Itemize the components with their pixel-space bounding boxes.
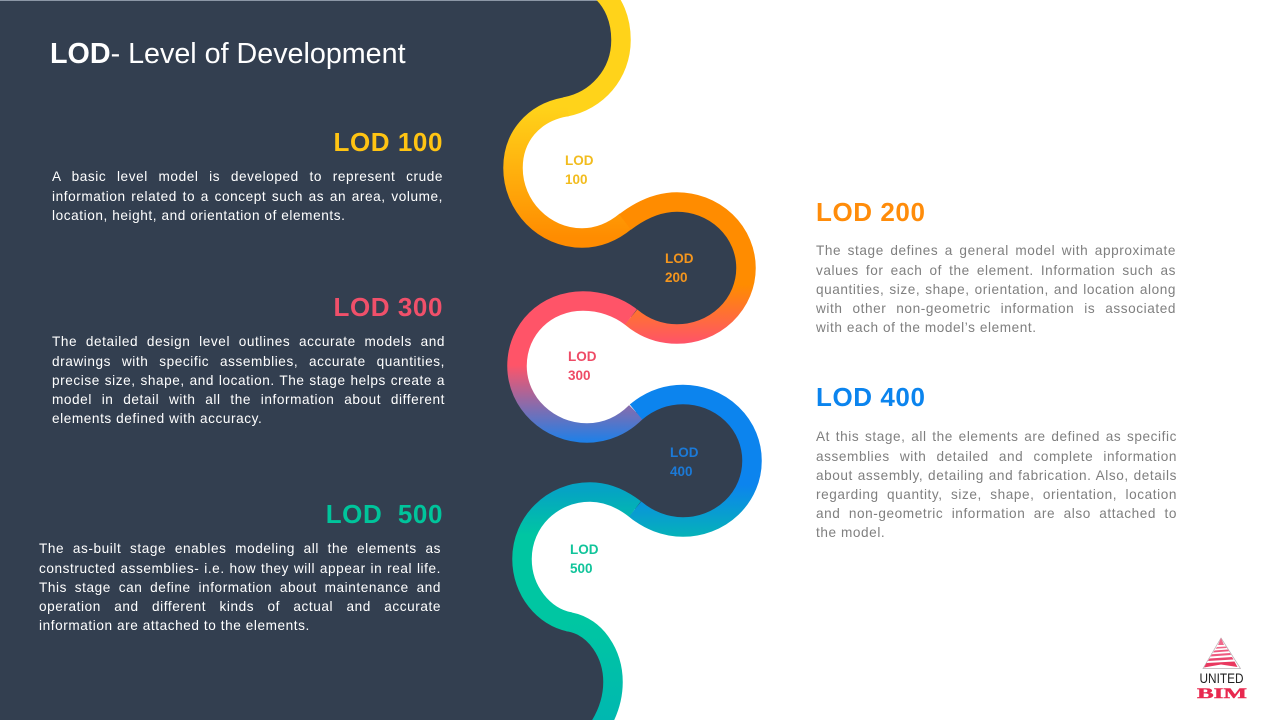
ribbon label: LOD 500: LOD: [570, 542, 598, 557]
text: LOD 400 description: assemblies with detailed and complete information: [816, 449, 1177, 464]
text: LOD 500 description: The as-built stage enables modeling all the elements as: [39, 541, 441, 556]
ribbon label: LOD 100: 100: [565, 172, 588, 187]
ribbon segment: teal bottom: [568, 622, 613, 720]
ribbon label: LOD 200: [665, 251, 694, 285]
ribbon label: LOD 500: 500: [570, 561, 593, 576]
text: LOD 400 description: and non-geometric information are also attached to: [816, 506, 1177, 521]
ribbon segment: LOD 400: [635, 394, 752, 527]
ribbon label: LOD 100: [565, 153, 594, 187]
text: LOD 200 description: [816, 243, 1176, 335]
text: LOD 300 description: model in detail with all the information about different: [52, 392, 445, 407]
ribbon label: LOD 200: 200: [665, 270, 688, 285]
text: LOD 200 description: with each of the model’s element.: [816, 320, 1037, 335]
heading: LOD 500: LOD 500: [326, 499, 443, 529]
text: LOD 100 description: location, height, and orientation of elements.: [52, 208, 345, 223]
ribbon label: LOD 400: LOD: [670, 445, 698, 460]
ribbon label: LOD 300: 300: [568, 368, 591, 383]
text: LOD 500 description: operation and different kinds of actual and accurate: [39, 599, 441, 614]
text: LOD 300 description: precise size, shape, and location. The stage helps create a: [52, 373, 445, 388]
text: LOD 200 description: The stage defines a general model with approximate: [816, 243, 1176, 258]
ribbon label: LOD 400: [670, 445, 698, 479]
title: LOD- Level of Development: [50, 38, 406, 70]
text: LOD 500 description: [39, 541, 441, 633]
text: LOD 100 description: A basic level model is developed to represent crude: [52, 169, 443, 184]
ribbon label: LOD 300: LOD: [568, 349, 596, 364]
ribbon segment: LOD 100: [513, 107, 626, 238]
text: LOD 500 description: This stage can define information about maintenance and: [39, 580, 441, 595]
text: LOD 400 description: [816, 429, 1177, 540]
text: LOD 200 description: quantities, size, shape, orientation, and location along: [816, 282, 1176, 297]
text: LOD 400 description: At this stage, all the elements are defined as specific: [816, 429, 1177, 444]
ribbon segment: yellow top: [565, 0, 621, 107]
text: LOD 100 description: [52, 169, 443, 223]
text: LOD 100 description: information related to a concept such as an area, volume,: [52, 189, 443, 204]
logo wordmark BIM: BIM: [1197, 686, 1247, 702]
text: LOD 400 description: the model.: [816, 525, 885, 540]
ribbon segment: LOD 200: [625, 202, 746, 334]
text: LOD 200 description: with other non-geometric information is associated: [816, 301, 1176, 316]
heading: LOD 300: LOD 300: [334, 292, 443, 322]
text: LOD 300 description: [52, 334, 445, 426]
ribbon segment: LOD 500: [522, 492, 635, 622]
logo: United BIM: [1197, 638, 1247, 702]
heading: LOD 100: LOD 100: [334, 127, 443, 157]
dark background panel: [0, 0, 752, 720]
heading: LOD 400: LOD 400: [816, 382, 925, 412]
heading: LOD 200: LOD 200: [816, 197, 925, 227]
text: LOD 300 description: drawings with specific assemblies, accurate quantities,: [52, 354, 445, 369]
ribbon label: LOD 300: [568, 349, 596, 383]
logo wordmark UNITED: UNITED: [1200, 671, 1244, 686]
text: LOD 300 description: elements defined with accuracy.: [52, 411, 262, 426]
logo triangle: [1203, 638, 1240, 668]
text: LOD 500 description: constructed assemblies- i.e. how they will appear in real life.: [39, 561, 441, 576]
ribbon segment: LOD 300: [517, 301, 636, 433]
ribbon label: LOD 500: [570, 542, 598, 576]
text: LOD 500 description: information are attached to the elements.: [39, 618, 310, 633]
ribbon label: LOD 100: LOD: [565, 153, 594, 168]
text: LOD 400 description: regarding quantity, size, shape, orientation, location: [816, 487, 1177, 502]
ribbon label: LOD 200: LOD: [665, 251, 694, 266]
text: LOD 400 description: about assembly, detailing and fabrication. Also, details: [816, 468, 1177, 483]
ribbon label: LOD 400: 400: [670, 464, 693, 479]
text: LOD 300 description: The detailed design level outlines accurate models and: [52, 334, 445, 349]
text: LOD 200 description: values for each of the element. Information such as: [816, 263, 1176, 278]
